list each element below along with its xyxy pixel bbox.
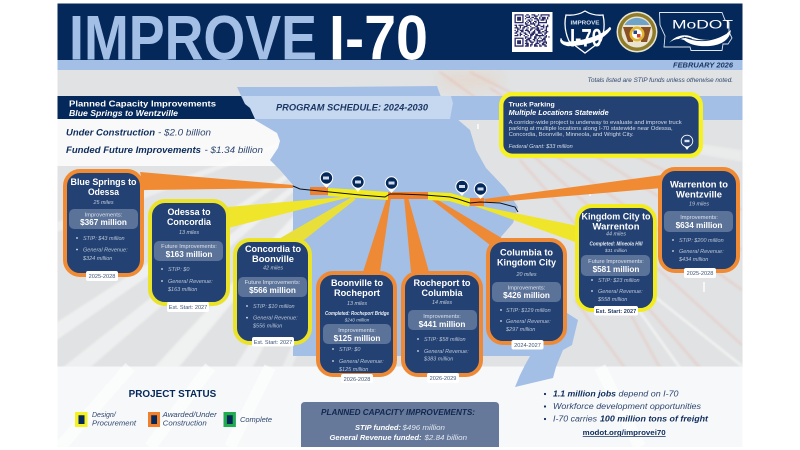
legend: design/procurement: [75, 412, 137, 428]
panel: Columbia to Kingdom City: [488, 240, 565, 350]
panel: Kingdom City to Warrenton: 44 miles: [606, 232, 626, 238]
logo: Improve I-70 shield: [560, 11, 611, 53]
panel: Columbia to Kingdom City: Columbia to: [500, 248, 553, 258]
key facts: modot.org/improvei70: [583, 428, 666, 437]
panel: Odessa to Concordia: [150, 201, 228, 312]
panel: funding totals: [301, 402, 499, 447]
panel: truck parking: Truck Parking: [509, 102, 555, 109]
panel: Rocheport to Columbia: General Revenue:: [424, 349, 469, 355]
panel: funding totals: $2.84 billion: [423, 433, 467, 442]
panel: Kingdom City to Warrenton: STIP: $23 million: [598, 278, 640, 284]
panel: Boonville to Rocheport: General Revenue:: [339, 359, 384, 365]
key facts: Workforce development opportunities: [553, 402, 701, 411]
panel: funding totals: STIP funded:: [355, 423, 402, 432]
panel: Odessa to Concordia: Future Improvements:: [161, 244, 217, 250]
panel: Odessa to Concordia: Concordia: [167, 217, 212, 228]
panel: Kingdom City to Warrenton: $558 million: [597, 297, 627, 303]
panel: truck parking: [501, 94, 701, 156]
panel: Kingdom City to Warrenton: Warrenton: [592, 222, 640, 232]
panel: funding totals: PLANNED CAPACITY IMPROVEMENTS:: [321, 408, 475, 417]
panel: Blue Springs to Odessa: STIP: $43 million: [83, 236, 125, 242]
key facts: I-70 carries: [553, 415, 597, 424]
legend: complete: [224, 412, 272, 427]
panel: Warrenton to Wentzville: Improvements:: [680, 215, 718, 221]
header bar: [58, 4, 742, 74]
legend: design/procurement: Procurement: [92, 421, 137, 428]
panel: funding totals: General Revenue funded:: [330, 433, 422, 442]
legend: awarded/under construction: [148, 412, 217, 428]
panel: Kingdom City to Warrenton: [577, 206, 655, 316]
panel: Boonville to Rocheport: Rocheport: [334, 288, 381, 299]
panel: Boonville to Rocheport: Completed: Rocheport Bridge: [325, 311, 389, 317]
panel: Rocheport to Columbia: $383 million: [423, 356, 453, 362]
panel: Boonville to Rocheport: Improvements:: [338, 328, 376, 334]
panel: Kingdom City to Warrenton: Future Improvements:: [588, 259, 644, 265]
panel: Kingdom City to Warrenton: Kingdom City to: [582, 212, 651, 222]
panel: Blue Springs to Odessa: $324 million: [82, 256, 112, 262]
panel: truck parking: Multiple Locations Statewide: [509, 110, 609, 117]
panel: Columbia to Kingdom City: 2024-2027: [514, 343, 541, 349]
program schedule band: [242, 96, 453, 119]
panel: funding totals: $496 million: [401, 423, 445, 432]
panel: Columbia to Kingdom City: STIP: $129 million: [506, 308, 551, 314]
panel: Concordia to Boonville: $556 million: [252, 324, 282, 330]
title: I-70: [329, 4, 428, 74]
panel: Boonville to Rocheport: 2026-2028: [344, 377, 370, 383]
date: FEBRUARY 2026: [673, 61, 734, 70]
funding note: Totals listed are STIP funds unless otherwise noted.: [588, 77, 733, 84]
I-70 route map: [293, 186, 518, 212]
panel: Odessa to Concordia: General Revenue:: [168, 279, 213, 285]
panel: Warrenton to Wentzville: Wentzville: [676, 190, 722, 200]
panel: Rocheport to Columbia: Rocheport to: [414, 278, 471, 289]
key facts: [544, 390, 708, 437]
panel: Warrenton to Wentzville: $434 million: [678, 257, 708, 263]
panel: Kingdom City to Warrenton: General Revenue:: [598, 289, 643, 295]
key facts: 1.1 million jobs: [553, 390, 617, 399]
logo: MoDOT: MoDOT: [672, 20, 733, 32]
panel: Columbia to Kingdom City: General Revenue:: [506, 319, 551, 325]
panel: Concordia to Boonville: General Revenue:: [253, 316, 298, 322]
legend: complete: Complete: [240, 417, 272, 424]
panel: Warrenton to Wentzville: Warrenton to: [670, 180, 728, 190]
panel: truck parking: A corridor-wide project is underway to evaluate and improve truck: [509, 120, 682, 126]
panel: Odessa to Concordia: $163 million: [167, 287, 197, 293]
panel: Blue Springs to Odessa: $367 million: [80, 218, 127, 227]
panel: Concordia to Boonville: STIP: $10 million: [253, 304, 295, 310]
panel: Blue Springs to Odessa: Improvements:: [85, 212, 123, 218]
project status legend: PROJECT STATUS: [129, 389, 217, 400]
funding summary: - $1.34 billion: [204, 145, 263, 155]
panel: Rocheport to Columbia: [403, 273, 481, 383]
panel: Warrenton to Wentzville: 2025-2028: [687, 271, 713, 277]
legend: design/procurement: Design/: [92, 412, 117, 419]
panel: Boonville to Rocheport: $125 million: [334, 334, 380, 343]
panel: Odessa to Concordia: 13 miles: [179, 230, 199, 236]
program schedule band: PROGRAM SCHEDULE: 2024-2030: [276, 103, 428, 113]
panel: Odessa to Concordia: Odessa to: [168, 207, 211, 218]
panel: Warrenton to Wentzville: [660, 169, 738, 278]
panel: Columbia to Kingdom City: $297 million: [505, 327, 535, 333]
heading: planned capacity improvements: Blue Springs to Wentzville: [69, 109, 179, 118]
panel: Warrenton to Wentzville: STIP: $200 million: [679, 238, 724, 244]
panel: Blue Springs to Odessa: 25 miles: [92, 200, 114, 206]
panel: Columbia to Kingdom City: Kingdom City: [497, 258, 557, 268]
panel: Concordia to Boonville: [235, 240, 310, 346]
panel: Warrenton to Wentzville: $634 million: [676, 221, 722, 230]
panel: truck parking: Federal Grant: $33 million: [509, 144, 573, 150]
panel: Rocheport to Columbia: Columbia: [422, 288, 463, 299]
callout connectors: [140, 172, 662, 272]
key facts: depend on I-70: [618, 390, 679, 399]
panel: Concordia to Boonville: Concordia to: [245, 244, 301, 255]
panel: Boonville to Rocheport: Boonville to: [331, 278, 383, 289]
legend: awarded/under construction: Awarded/Under: [162, 412, 217, 419]
panel: Concordia to Boonville: $566 million: [249, 286, 296, 295]
logo: Missouri state seal: [616, 12, 658, 52]
panel: Boonville to Rocheport: $125 million: [338, 367, 368, 373]
panel: Warrenton to Wentzville: 19 miles: [689, 202, 709, 208]
project status legend: [75, 389, 272, 428]
panel: Concordia to Boonville: 42 miles: [263, 266, 283, 272]
icon: truck pin: [681, 135, 693, 150]
map of Missouri: [237, 86, 578, 387]
logo: Improve I-70 shield: I-70: [570, 24, 602, 52]
panel: Concordia to Boonville: Future Improvements:: [245, 280, 301, 286]
panel: Blue Springs to Odessa: General Revenue:: [83, 248, 128, 254]
panel: Boonville to Rocheport: 13 miles: [347, 301, 367, 307]
funding summary: Under Construction: [66, 128, 156, 138]
logo: MoDOT: [660, 12, 733, 50]
heading: planned capacity improvements: [58, 96, 255, 119]
panel: Kingdom City to Warrenton: Est. Start: 2027: [596, 309, 636, 315]
funding summary: Funded Future Improvements: [66, 145, 201, 155]
panel: Rocheport to Columbia: 2026-2029: [430, 376, 456, 382]
panel: Blue Springs to Odessa: Blue Springs to: [70, 177, 137, 188]
funding summary: [66, 128, 263, 155]
panel: Kingdom City to Warrenton: Completed: Mineola Hill: [590, 242, 643, 248]
panel: Columbia to Kingdom City: $426 million: [503, 291, 550, 300]
panel: Boonville to Rocheport: $240 million: [344, 318, 370, 322]
panel: Columbia to Kingdom City: 20 miles: [515, 272, 537, 278]
panel: Odessa to Concordia: STIP: $0: [168, 267, 190, 273]
QR code: [512, 12, 552, 52]
panel: Boonville to Rocheport: STIP: $0: [339, 347, 361, 353]
panel: Odessa to Concordia: Est. Start: 2027: [169, 305, 207, 311]
panel: Kingdom City to Warrenton: $581 million: [593, 265, 639, 274]
truck parking pin markers: [320, 172, 487, 199]
panel: Concordia to Boonville: Boonville: [252, 254, 294, 265]
panel: Blue Springs to Odessa: 2025-2028: [89, 274, 115, 280]
panel: Rocheport to Columbia: 14 miles: [432, 300, 452, 306]
panel: Concordia to Boonville: Est. Start: 2027: [254, 340, 292, 346]
panel: Columbia to Kingdom City: Improvements:: [508, 286, 546, 292]
background photo of highway streaks: [58, 70, 742, 366]
panel: Rocheport to Columbia: $441 million: [419, 320, 465, 329]
panel: truck parking: Concordia, Boonville, Minneola, and Wright City.: [509, 132, 634, 138]
legend: awarded/under construction: Construction: [163, 421, 207, 428]
panel: Odessa to Concordia: $163 million: [166, 250, 212, 259]
panel: Boonville to Rocheport: [318, 273, 395, 383]
key facts: 100 million tons of freight: [600, 415, 708, 424]
panel: Rocheport to Columbia: Improvements:: [423, 314, 461, 320]
panel: Kingdom City to Warrenton: $31 million: [604, 248, 627, 253]
logo: Improve I-70 shield: IMPROVE: [570, 20, 600, 26]
panel: Warrenton to Wentzville: General Revenue:: [679, 249, 724, 255]
panel: Blue Springs to Odessa: Odessa: [88, 187, 120, 198]
title: IMPROVE: [69, 4, 317, 74]
heading: planned capacity improvements: Planned Capacity Improvements: [69, 99, 216, 109]
panel: Rocheport to Columbia: STIP: $58 million: [424, 337, 466, 343]
funding summary: - $2.0 billion: [158, 128, 211, 138]
panel: truck parking: parking at multiple locations along I-70 statewide near Odessa,: [509, 126, 673, 132]
panel: Blue Springs to Odessa: [65, 171, 142, 281]
